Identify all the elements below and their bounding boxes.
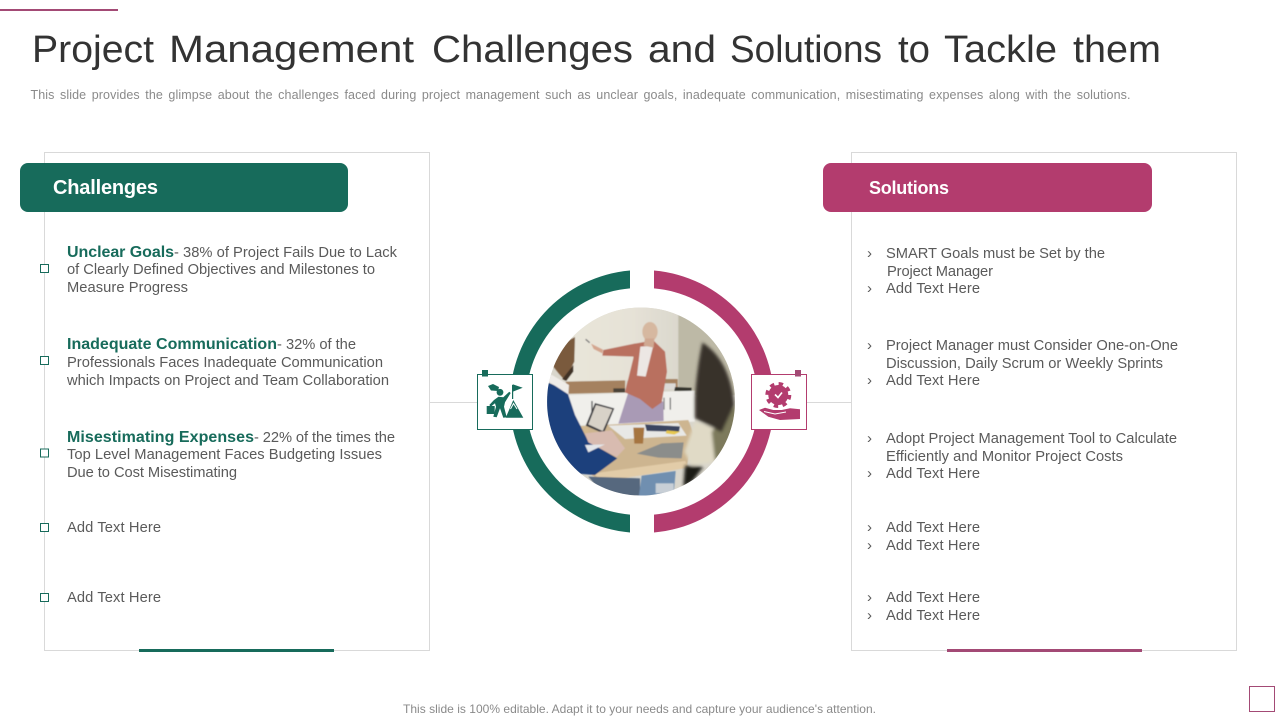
solution group 3: Add Text Here [886, 466, 980, 482]
challenge: misestimating expenses: Due to Cost Misestimating [67, 465, 237, 481]
challenge: unclear goals: Unclear Goals [67, 244, 174, 261]
title: to [898, 29, 930, 71]
title: Tackle [944, 29, 1057, 71]
solution group 5: › [867, 607, 872, 624]
heading: challenges: Challenges [53, 177, 158, 199]
challenge: unclear goals: of Clearly Defined Objectives and Milestones to [67, 262, 375, 278]
solution group 1: › [867, 280, 872, 297]
challenge: unclear goals: - 38% of Project Fails Due to Lack [174, 245, 398, 261]
corner square [1250, 686, 1274, 712]
solution group 4: › [867, 519, 872, 536]
title: Challenges [432, 29, 633, 71]
panel bottom accent [947, 649, 1142, 652]
solution group 1: Project Manager [887, 264, 993, 280]
challenge: inadequate communication: Professionals Faces Inadequate Communication [67, 355, 383, 371]
solution group 4: Add Text Here [886, 520, 980, 536]
panel frame [44, 152, 430, 650]
solution group 3: › [867, 430, 872, 447]
heading: solutions [823, 163, 1152, 212]
solution group 2: › [867, 337, 872, 354]
title: them [1073, 29, 1161, 71]
ring: green left arc [510, 270, 630, 532]
solution group 3: › [867, 465, 872, 482]
solution group 4: › [867, 537, 872, 554]
title: Management [169, 29, 414, 71]
title: and [648, 29, 716, 71]
solution group 1: SMART Goals must be Set by the [886, 246, 1105, 262]
footer note: This slide is 100% editable. Adapt it to your needs and capture your audience's attention. [403, 702, 876, 716]
solution group 3: Efficiently and Monitor Project Costs [886, 449, 1123, 465]
ring: magenta right arc [654, 270, 774, 532]
challenge: unclear goals: Measure Progress [67, 280, 188, 296]
bullet markers [40, 264, 48, 602]
subtitle: This slide provides the glimpse about the challenges faced during project management such as unclear goals, inadequate communication, misestimating expenses along with the solutions. [30, 88, 1130, 102]
challenge: inadequate communication: Inadequate Communication [67, 336, 277, 353]
challenge: placeholder 4: Add Text Here [67, 520, 161, 536]
icon box: challenges (climber and flag) [478, 370, 532, 430]
title: Project [32, 29, 154, 71]
heading: solutions: Solutions [869, 178, 949, 198]
solution group 2 [867, 337, 1178, 389]
solution group 5: Add Text Here [886, 590, 980, 606]
solution group 4: Add Text Here [886, 538, 980, 554]
challenge: unclear goals [67, 244, 398, 296]
panel bottom accent [139, 649, 334, 652]
connector lines [430, 402, 851, 404]
solution group 5: Add Text Here [886, 608, 980, 624]
challenge: placeholder 5: Add Text Here [67, 590, 161, 606]
panel: solutions [823, 152, 1236, 652]
solution group 1 [867, 245, 1105, 297]
solution group 3 [867, 430, 1177, 482]
challenge: inadequate communication: - 32% of the [277, 337, 356, 353]
heading: challenges [20, 163, 348, 212]
challenge: misestimating expenses: Misestimating Expenses [67, 429, 254, 446]
title [32, 29, 1161, 71]
solution group 5: › [867, 589, 872, 606]
challenge: misestimating expenses: Top Level Management Faces Budgeting Issues [67, 447, 382, 463]
solution group 2: Discussion, Daily Scrum or Weekly Sprints [886, 356, 1163, 372]
challenge: inadequate communication: which Impacts on Project and Team Collaboration [66, 373, 389, 389]
challenge: misestimating expenses [67, 429, 395, 481]
panel: challenges [20, 152, 430, 652]
panel frame [852, 152, 1236, 650]
solution group 2: › [867, 372, 872, 389]
icon box: solutions (gear in hand) [752, 370, 806, 430]
solution group 4 [867, 519, 980, 554]
central photo: presenter at whiteboard [545, 305, 740, 500]
solution group 5 [867, 589, 980, 624]
solution group 2: Project Manager must Consider One-on-One [886, 338, 1178, 354]
challenge: misestimating expenses: - 22% of the times the [254, 430, 395, 446]
solution group 3: Adopt Project Management Tool to Calculate [886, 431, 1177, 447]
solution group 1: Add Text Here [886, 281, 980, 297]
challenge: inadequate communication [66, 336, 389, 389]
top accent line [0, 9, 118, 11]
solution group 1: › [867, 245, 872, 262]
title: Solutions [730, 29, 882, 71]
solution group 2: Add Text Here [886, 373, 980, 389]
